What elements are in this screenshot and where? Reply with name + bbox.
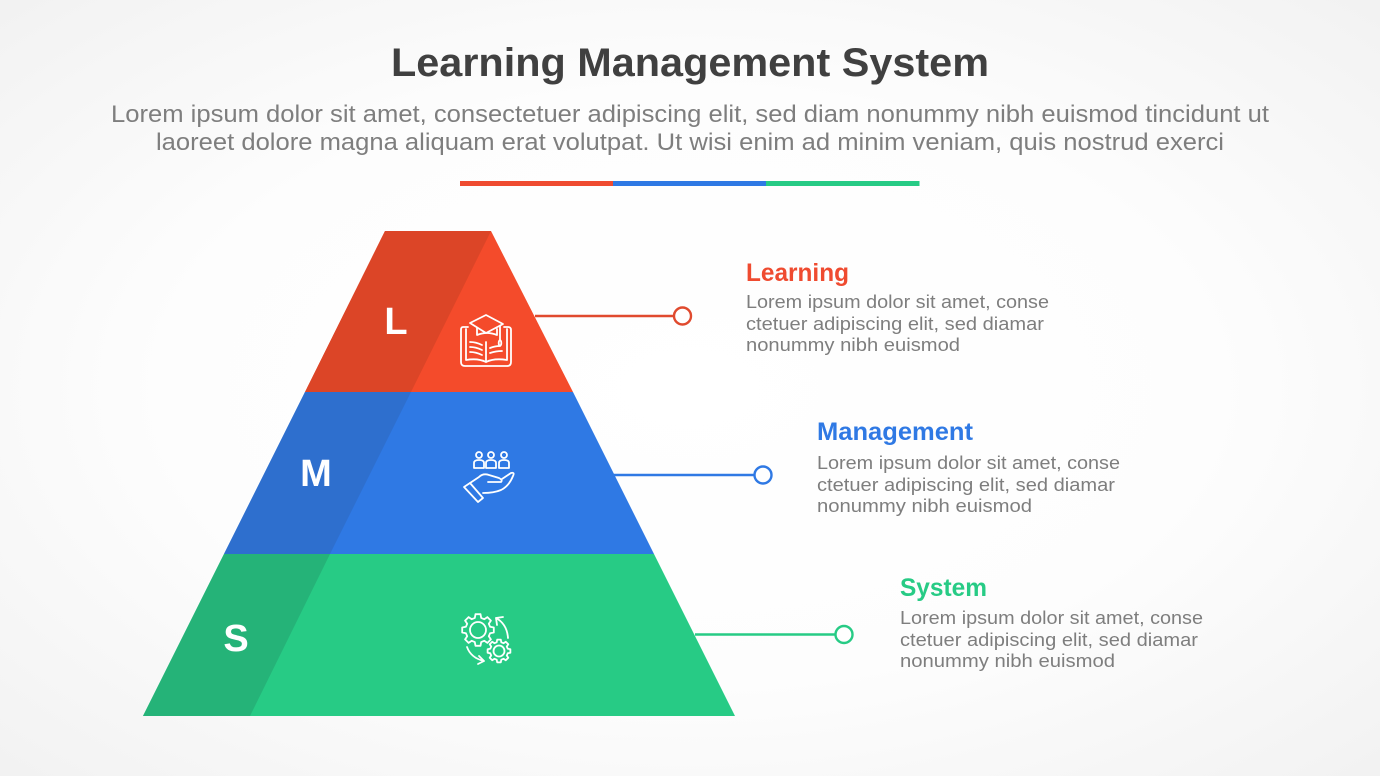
text block: learning: Learning (746, 259, 849, 287)
text block: learning: Lorem ipsum dolor sit amet, conse (746, 292, 1049, 312)
text block: learning (746, 259, 1049, 355)
text block: management: Lorem ipsum dolor sit amet, conse (817, 453, 1120, 473)
subtitle: Lorem ipsum dolor sit amet, consectetuer adipiscing elit, sed diam nonummy nibh euismod tincidunt ut (111, 101, 1269, 128)
text block: system: ctetuer adipiscing elit, sed diamar (900, 630, 1198, 650)
tier: management: M (300, 453, 332, 495)
title: Learning Management System (391, 41, 989, 85)
text block: management: Management (817, 418, 974, 446)
tier: management (224, 392, 654, 554)
tricolor divider (460, 181, 920, 186)
tier: learning (305, 231, 573, 392)
tier: system: S (223, 618, 249, 660)
text block: management: ctetuer adipiscing elit, sed diamar (817, 475, 1115, 495)
subtitle: laoreet dolore magna aliquam erat volutpat. Ut wisi enim ad minim veniam, quis nostrud exerci (156, 129, 1224, 156)
connector: management (613, 466, 772, 484)
text block: management: nonummy nibh euismod (817, 496, 1032, 516)
subtitle (111, 101, 1269, 156)
icon: hand holding people (464, 452, 514, 502)
icon: gears with arrows (462, 614, 510, 664)
text block: learning: ctetuer adipiscing elit, sed diamar (746, 314, 1044, 334)
text block: system (900, 574, 1203, 671)
connector: learning (535, 308, 691, 324)
text block: management (817, 418, 1120, 516)
pyramid (143, 231, 735, 716)
text block: system: Lorem ipsum dolor sit amet, conse (900, 608, 1203, 628)
connector: system (695, 626, 852, 643)
tier: system (143, 554, 735, 716)
text block: system: System (900, 574, 987, 602)
text block: learning: nonummy nibh euismod (746, 335, 960, 355)
icon: book with graduation cap (461, 315, 511, 366)
text block: system: nonummy nibh euismod (900, 651, 1115, 671)
tier: learning: L (384, 301, 408, 343)
